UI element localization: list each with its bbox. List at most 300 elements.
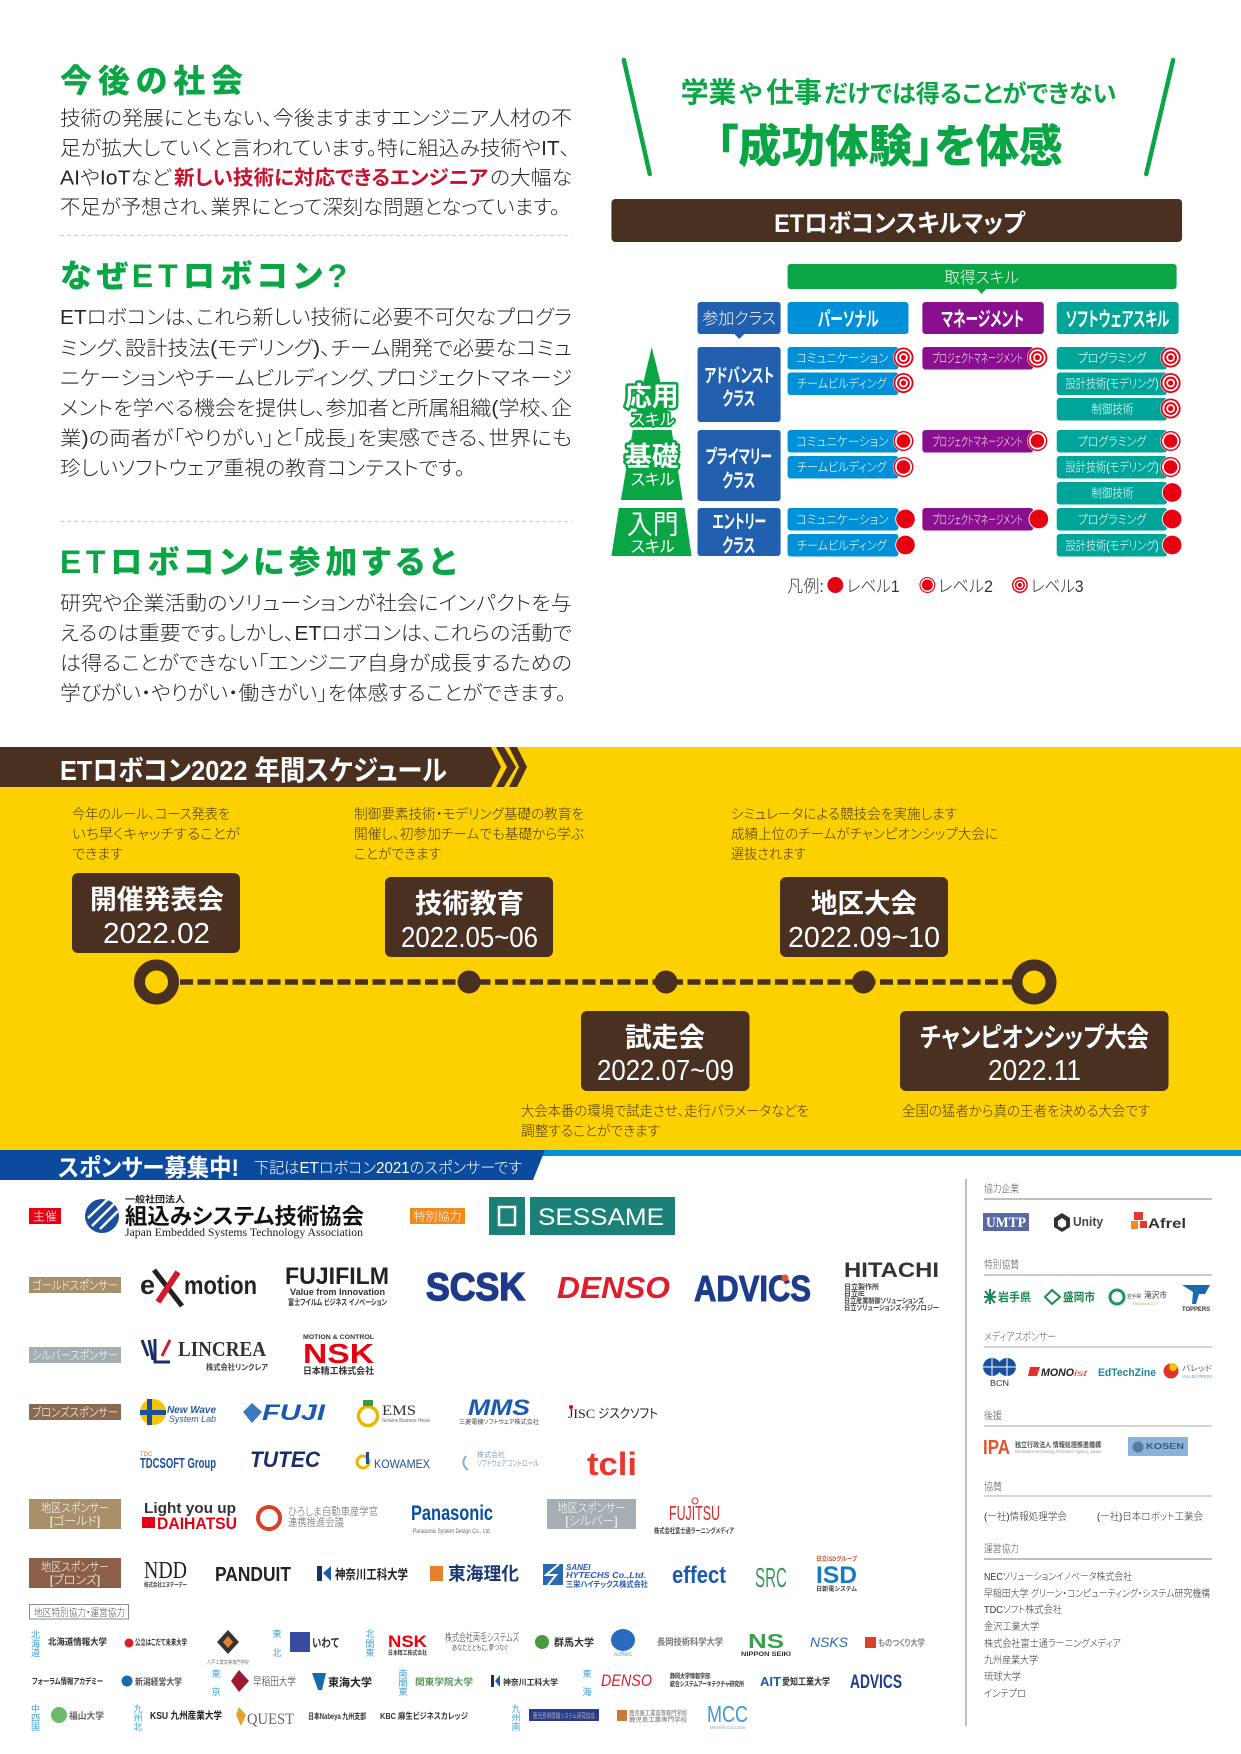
logo: Tokai University: 東海大学 (328, 1675, 372, 1689)
logo: Takizawa City: 岩手県 (1127, 1293, 1141, 1300)
logo: NSK: 日本精工株式会社 (303, 1365, 374, 1376)
logo: TOPPERS (1182, 1285, 1211, 1313)
logo: Takizawa City: 滝沢市 (1144, 1290, 1167, 1300)
logo: Nippon Seiki (741, 1631, 791, 1658)
header: software skills: ソフトウェアスキル (1066, 308, 1169, 331)
logo: JASA: 組込みシステム技術協会 (125, 1204, 364, 1229)
logo: Ryomo Systems (445, 1631, 519, 1652)
region: Hokkaido: 北 (31, 1630, 40, 1640)
logo: AIT: 愛知工業大学 (782, 1676, 830, 1688)
logo: ISD: 日新電システム (816, 1585, 857, 1593)
panel: cooperating companies (983, 1183, 1212, 1232)
tier: basic skills: 基礎 (625, 442, 679, 472)
panel: operational cooperation: インテプロ (984, 1688, 1026, 1700)
skill: advanced team building: チームビルディング (797, 376, 887, 391)
legend (787, 577, 1084, 596)
region: Hokkaido (31, 1630, 40, 1658)
logo: Nagaoka University of Technology: 長岡技術科学大学 (657, 1636, 723, 1647)
logo: Fujitsu: 株式会社富士通ラーニングメディア (654, 1526, 734, 1535)
event: technical education: 開催し、初参加チームでも基礎から学ぶ (354, 826, 584, 842)
logo: Fujitsu (654, 1498, 734, 1535)
panel: operational cooperation: NECソリューションイノベータ株式会社 (984, 1570, 1132, 1583)
skill: advanced communication: コミュニケーション (796, 351, 889, 366)
text block: why ET Robocon body: 珍しいソフトウェア重視の教育コンテストです。 (60, 457, 465, 480)
tier: applied skills: スキル (631, 412, 675, 429)
logo: Panduit: PANDUIT (215, 1564, 291, 1586)
text block: joining body: えるのは重要です。しかし、ETロボコンは、これらの活動で (60, 622, 572, 645)
logo: Afrel: Afrel (1148, 1215, 1186, 1231)
callout: success experience headline: 学業 (681, 77, 736, 108)
header: personal: パーソナル (818, 308, 879, 331)
tier: applied skills (625, 347, 679, 429)
event: championship: 2022.11 (988, 1055, 1081, 1087)
logo: Fukuyama University: 福山大学 (69, 1710, 104, 1721)
panel: media sponsors: メディアスポンサー (984, 1330, 1056, 1343)
heading: skill map bar: ETロボコンスキルマップ (774, 210, 1026, 238)
header: management: マネージメント (941, 308, 1024, 331)
text block: why ET Robocon body: ETロボコンは、これら新しい技術に必要不可欠なプログラ (60, 306, 572, 329)
logo: MONOist: MONO (1041, 1367, 1074, 1379)
logo: Waseda University (231, 1670, 296, 1692)
region: Tohoku: 東 (272, 1628, 282, 1639)
region: Tokai: 東 (582, 1668, 592, 1679)
event: championship: 全国の猛者から真の王者を決める大会です (902, 1103, 1150, 1119)
label: regional bronze: 地区スポンサー (41, 1560, 109, 1574)
region: Tokyo (211, 1668, 221, 1697)
class: primary: プライマリー (705, 446, 772, 468)
logo: Afrel (1131, 1212, 1186, 1231)
panel: sponsors heading band (0, 1150, 1241, 1182)
logo: FUJIFILM (285, 1263, 389, 1307)
heading: future society: 今後の社会 (60, 63, 243, 99)
logo: Software Control: 株式会社 (477, 1450, 505, 1459)
event: test run: 試走会 (625, 1023, 705, 1053)
logo: ADVICS: ADVICS (694, 1268, 811, 1309)
logo: New Wave System Lab: System Lab (169, 1414, 216, 1424)
tier: entry skills (611, 508, 692, 556)
skill: primary programming (1057, 430, 1181, 452)
logo: AIT: AIT (760, 1674, 781, 1689)
panel: support: 後援 (984, 1410, 1002, 1422)
event: announcement: いち早くキャッチすることが (72, 826, 240, 842)
logo: ISD: ISD (816, 1562, 857, 1589)
region: Tokai (582, 1668, 592, 1697)
panel: endorsement: 協賛 (984, 1480, 1002, 1493)
legend: レベル2 (938, 577, 993, 596)
class: advanced (698, 347, 781, 422)
skill: primary team building: チームビルディング (797, 459, 887, 475)
label: organizer: 主催 (33, 1210, 57, 1224)
logo: Ryomo Systems: あなたとともに、夢つなぐ (452, 1643, 508, 1652)
logo: Unity: Unity (1073, 1214, 1104, 1229)
heading: joining ET Robocon: ETロボコンに参加すると (60, 544, 456, 580)
logo: blue emblem (611, 1629, 635, 1658)
region: Minami-Kanto: 東 (398, 1686, 408, 1697)
panel: annual schedule (0, 747, 1241, 1150)
event: technical education: 2022.05~06 (401, 922, 538, 954)
logo: ISD: 日立ISDグループ (816, 1555, 857, 1563)
label: regional special cooperation (30, 1604, 128, 1619)
header: personal (788, 302, 908, 334)
logo: Software Control (463, 1450, 539, 1470)
panel: sponsors heading band: スポンサー募集中! (58, 1155, 239, 1182)
label: organizer (29, 1208, 61, 1224)
text block: future society body: の大幅な (490, 166, 572, 190)
text block: why ET Robocon body: ミング、設計技法(モデリング)、チーム開発で必要なコミュ (60, 337, 572, 360)
text block: future society body (60, 107, 572, 219)
logo: TUTEC: TUTEC (250, 1447, 321, 1472)
region: Kyushu-south: 九 (511, 1704, 521, 1714)
logo: Fukuyama University (51, 1707, 104, 1723)
region: Chushikoku: 四 (31, 1713, 40, 1723)
label: silver sponsors: シルバースポンサー (32, 1348, 118, 1362)
panel: cooperating companies: 協力企業 (984, 1183, 1019, 1195)
logo: Hitachi: 日立ソリューションズ・テクノロジー (844, 1303, 939, 1312)
logo: Gunma University (535, 1635, 594, 1649)
logo: BCN (983, 1358, 1016, 1388)
logo: Waseda University: 早稲田大学 (253, 1675, 296, 1688)
panel: future society (60, 63, 572, 219)
logo row: regional supporters 1 (31, 1628, 925, 1666)
logo: Kanagawa IT regional: 神奈川工科大学 (503, 1677, 558, 1687)
panel: media sponsors (983, 1330, 1212, 1388)
logo: Kanagawa Institute of Technology: 神奈川工科大学 (335, 1567, 408, 1582)
skill: entry team building (788, 534, 916, 556)
panel: operational cooperation: TDCソフト株式会社 (984, 1603, 1062, 1616)
logo: New Wave System Lab: New Wave (167, 1405, 216, 1416)
panel: operational cooperation: 早稲田大学 グリーン・コンピューティング・システム研究機構 (984, 1587, 1210, 1600)
callout: success experience headline: や (739, 81, 762, 108)
label: regional silver (547, 1499, 636, 1529)
region: Tokai: 海 (582, 1686, 592, 1697)
class: entry: クラス (722, 535, 755, 557)
event: regional contest: 2022.09~10 (788, 922, 940, 954)
logo: Hiroshima automotive council: ひろしま自動車産学官 (288, 1505, 378, 1518)
skill: entry modeling (1057, 534, 1182, 556)
logo: NSK (303, 1334, 374, 1376)
event: technical education: 制御要素技術・モデリング基礎の教育を (354, 806, 584, 822)
tier: basic skills: スキル (631, 472, 675, 489)
region: Kyushu-south (511, 1704, 521, 1732)
logo: FUJIFILM: Value from Innovation (290, 1287, 385, 1297)
tier: entry skills: スキル (631, 539, 675, 556)
label: gold sponsors: ゴールドスポンサー (32, 1278, 118, 1292)
logo: KOWAMEX (357, 1452, 430, 1471)
logo: IPA: 独立行政法人 情報処理推進機構 (1015, 1440, 1101, 1449)
region: Kita-Kanto: 関 (365, 1639, 375, 1649)
panel: operational cooperation: 九州産業大学 (984, 1654, 1038, 1666)
panel: why ET Robocon (60, 258, 572, 480)
logo: Ryomo Systems: 株式会社両毛システムズ (445, 1631, 519, 1644)
label: bronze sponsors: ブロンズスポンサー (32, 1404, 118, 1420)
logo: MONOist (1028, 1367, 1088, 1379)
skill: advanced programming: プログラミング (1078, 351, 1147, 366)
logo: KOSEN (1128, 1437, 1188, 1456)
region: Tohoku: 北 (272, 1648, 282, 1658)
logo: Daihatsu: Light you up (144, 1500, 236, 1517)
skill: primary project management (922, 430, 1048, 452)
text block: why ET Robocon body: メントを学べる機会を提供し、参加者と所属組織(学校、企 (60, 397, 572, 420)
skill: primary team building (788, 456, 914, 478)
region: Chushikoku: 中 (31, 1703, 40, 1714)
logo: JISC: ジスクソフト (598, 1406, 658, 1421)
callout: success experience headline: だけでは得ることができない (824, 80, 1116, 108)
logo: MCC: MCC (707, 1701, 748, 1727)
region: Minami-Kanto (398, 1668, 408, 1697)
logo: Hitachi: 日立IE (844, 1289, 865, 1298)
logo: LINCREA: LINCREA (178, 1337, 267, 1361)
skill: entry project management (922, 508, 1049, 530)
skill: entry programming (1057, 508, 1182, 530)
skill: entry team building: チームビルディング (797, 538, 887, 553)
region: Minami-Kanto: 関 (398, 1678, 408, 1688)
logo: effect: effect (672, 1562, 726, 1589)
logo: NSK regional (388, 1632, 428, 1657)
callout: success experience headline: 「成功体験」を体感 (716, 121, 1063, 172)
logo: Sanei Hytechs: SANEI (566, 1563, 591, 1572)
logo: NSK regional: 日本精工株式会社 (388, 1649, 427, 1657)
event: regional contest: 選抜されます (731, 846, 806, 862)
logo: FUJI: FUJI (262, 1400, 326, 1425)
logo: Shizuoka University program (670, 1671, 744, 1688)
legend: レベル3 (1031, 577, 1084, 596)
logo: Hitachi: HITACHI (844, 1259, 939, 1282)
logo: Valeo Press: VALLED PRESS (1182, 1374, 1212, 1379)
class: primary (698, 430, 781, 501)
logo: TOPPERS: TOPPERS (1182, 1306, 1211, 1313)
text block: why ET Robocon body (60, 306, 572, 480)
label: special cooperation: 特別協力 (413, 1210, 462, 1224)
logo: Panasonic: Panasonic (411, 1502, 493, 1525)
logo: tcli: tcli (587, 1446, 637, 1482)
text block: future society body: 技術の発展にともない、今後ますますエンジニア人材の不 (60, 107, 572, 130)
heading: acquired skills (788, 264, 1177, 294)
logo: TDC SOFT: TDCSOFT Group (140, 1455, 216, 1472)
skill: advanced control: 制御技術 (1092, 402, 1133, 417)
logo: EMS: EMS (382, 1403, 416, 1419)
logo: IPA (983, 1437, 1101, 1459)
logo: eXmotion (140, 1270, 257, 1306)
logo: eXmotion: motion (184, 1270, 257, 1300)
event: regional contest: シミュレータによる競技会を実施します (731, 806, 957, 822)
header: class column (698, 302, 781, 339)
skill: advanced modeling (1057, 372, 1181, 395)
logo: DENSO: DENSO (557, 1270, 670, 1305)
heading: acquired skills: 取得スキル (944, 269, 1019, 287)
event: regional contest: 成績上位のチームがチャンピオンシップ大会に (731, 826, 998, 842)
logo: Niigata University of Management (122, 1676, 182, 1687)
panel: joining ET Robocon (60, 544, 572, 705)
logo: MMS (459, 1395, 539, 1426)
logo: Panasonic: Panasonic System Design Co., Ltd. (413, 1529, 491, 1535)
region: Chushikoku: 国 (31, 1722, 40, 1732)
panel: operational cooperation: 琉球大学 (984, 1671, 1021, 1683)
logo: Software Control: ソフトウェアコントロール (477, 1459, 539, 1468)
logo: EMS: Genuine Business House (382, 1418, 430, 1424)
logo: EMS (358, 1400, 430, 1426)
class: advanced: アドバンスト (704, 365, 774, 387)
panel: endorsement: (一社)日本ロボット工業会 (1097, 1510, 1203, 1523)
event: test run (521, 1011, 809, 1139)
logo: JASA: Japan Embedded Systems Technology Association (125, 1225, 363, 1239)
logo: navy banner: 鹿児島県情報システム研究協会 (533, 1711, 595, 1720)
heading: skill map bar (611, 199, 1182, 242)
logo: Morioka City: 盛岡市 (1063, 1290, 1095, 1304)
text block: future society body: 新しい技術に対応できるエンジニア (174, 166, 489, 190)
logo: MMS: 三菱電機ソフトウェア株式会社 (459, 1418, 539, 1426)
logo: Fujitsu: FUJITSU (669, 1503, 720, 1525)
panel: sponsors heading band: 下記はETロボコン2021のスポンサーです (254, 1159, 522, 1177)
logo: IPA: IPA (983, 1437, 1010, 1459)
event: technical education: 技術教育 (415, 889, 524, 919)
logo: Takizawa City: TAKIZAWA CITY (1132, 1302, 1160, 1306)
logo: Takizawa City (1110, 1290, 1167, 1306)
logo: Kanto Gakuin University: 関東学院大学 (415, 1676, 473, 1687)
logo row: regional supporters 2 (32, 1668, 902, 1697)
panel: special sponsorship (984, 1258, 1212, 1313)
logo: SCSK: SCSK (426, 1266, 525, 1309)
logo: Morioka City (1045, 1290, 1095, 1304)
class: entry (698, 508, 781, 557)
event: championship (900, 1011, 1168, 1119)
region: Kita-Kanto: 東 (365, 1647, 375, 1658)
skill: entry modeling: 設計技術(モデリング) (1066, 538, 1159, 553)
pyramid: skill levels (611, 347, 692, 556)
logo: Nippon Seiki: NS (748, 1631, 784, 1653)
logo: FUJI (243, 1400, 326, 1425)
text block: future society body: 足が拡大していくと言われています。特に組込み技術やIT、 (60, 137, 570, 160)
label: regional silver: 地区スポンサー (558, 1501, 626, 1515)
logo: NSK regional: NSK (388, 1632, 428, 1651)
logo: NDD: NDD (144, 1558, 187, 1584)
logo: MONOist: ist (1074, 1369, 1088, 1378)
skill: entry project management: プロジェクトマネージメント (932, 513, 1023, 527)
logo: SESSAME (489, 1197, 675, 1235)
logo: Iwate: いわて (312, 1636, 339, 1650)
skill: primary project management: プロジェクトマネージメント (932, 435, 1023, 449)
logo: Kanagawa IT regional (491, 1675, 558, 1687)
logo: MCC: MINAMI COLLEGE (710, 1725, 746, 1730)
event: announcement (72, 806, 240, 953)
logo: NSK: MOTION & CONTROL (303, 1334, 374, 1341)
logo: Daihatsu (142, 1500, 237, 1533)
logo: FUJIFILM: 富士フイルム ビジネス イノベーション (288, 1297, 387, 1307)
logo: Forum Information Academy: フォーラム情報アカデミー (32, 1676, 103, 1686)
logo: LINCREA: 株式会社リンクレア (206, 1362, 268, 1372)
logo: navy banner (529, 1709, 599, 1721)
heading: annual schedule: ETロボコン2022 年間スケジュール (60, 755, 447, 786)
logo: technical college: 鹿児島工業高等専門学校 (629, 1708, 687, 1717)
region: Kyushu-north: 北 (133, 1722, 143, 1732)
event: announcement: 2022.02 (103, 918, 210, 950)
event: announcement: 開催発表会 (90, 885, 224, 915)
skill: primary communication: コミュニケーション (796, 435, 889, 449)
logo: Daihatsu: DAIHATSU (157, 1514, 237, 1533)
logo: Shizuoka University program: 統合システムアーキテクチャ研究所 (670, 1679, 744, 1688)
logo: Nippon Seiki: NIPPON SEIKI (741, 1652, 791, 1658)
tier: entry skills: 入門 (627, 510, 679, 540)
skill: primary control: 制御技術 (1092, 486, 1133, 501)
skill: advanced modeling: 設計技術(モデリング) (1066, 376, 1159, 391)
panel: operational cooperation: 金沢工業大学 (984, 1621, 1039, 1633)
event: regional contest: 地区大会 (811, 889, 917, 919)
logo: Hitachi (844, 1259, 939, 1312)
logo: KSU: KSU 九州産業大学 (150, 1709, 222, 1722)
region: Kyushu-south: 州 (511, 1713, 521, 1723)
logo: KBC: KBC 麻生ビジネスカレッジ (380, 1711, 469, 1721)
callout: success experience headline: 仕事 (766, 77, 822, 108)
timeline (140, 965, 1051, 999)
class: advanced: クラス (722, 388, 755, 410)
legend: レベル1 (847, 577, 899, 596)
logo: ISD (816, 1555, 857, 1593)
logo: LINCREA (142, 1337, 268, 1372)
skill: advanced team building (788, 372, 914, 395)
logo: Gunma University: 群馬大学 (554, 1636, 594, 1649)
logo: Quest (236, 1707, 294, 1728)
skill: primary control (1057, 482, 1182, 504)
logo: diamond emblem: 八戸工業高等専門学校 (207, 1659, 249, 1666)
skill: primary modeling (1057, 456, 1181, 478)
label: regional gold: 地区スポンサー (41, 1501, 109, 1515)
logo: NDD: 株式会社エヌデーデー (144, 1581, 187, 1589)
heading: why ET Robocon: なぜETロボコン? (60, 258, 347, 294)
logo: Valeo Press: バレッド (1182, 1364, 1212, 1373)
label: regional bronze (29, 1558, 121, 1588)
event: technical education: ことができます (354, 846, 441, 862)
logo: blue emblem: softec (614, 1652, 632, 1658)
logo: Tokai Rika: 東海理化 (448, 1564, 519, 1584)
skill: advanced control (1057, 398, 1181, 420)
region: Hokkaido: 海 (31, 1638, 40, 1649)
logo: Tokai University (312, 1673, 372, 1690)
logo: JISC (568, 1405, 658, 1421)
text block: future society body: 不足が予想され、業界にとって深刻な問題となっています。 (60, 196, 560, 219)
skill: entry communication: コミュニケーション (796, 513, 889, 527)
panel: endorsement: (一社)情報処理学会 (984, 1510, 1067, 1523)
callout: success experience headline (624, 60, 1173, 174)
region: Tokyo: 京 (211, 1687, 221, 1697)
legend: 凡例: (787, 577, 824, 596)
skill: advanced communication (788, 347, 914, 370)
logo: DENSO regional: DENSO (601, 1671, 652, 1690)
logo: BCN: BCN (990, 1379, 1009, 1388)
panel: operational cooperation: 運営協力 (984, 1542, 1019, 1555)
text block: joining body: は得ることができない「エンジニア自身が成長するための (60, 652, 572, 675)
logo: NSK: NSK (303, 1338, 374, 1369)
logo: Future University Hakodate (124, 1637, 187, 1648)
skill: primary programming: プログラミング (1078, 435, 1147, 449)
logo: TDC SOFT (140, 1452, 216, 1472)
event: announcement: できます (72, 846, 123, 862)
label: regional gold (29, 1499, 121, 1529)
skill: entry programming: プログラミング (1078, 513, 1147, 527)
logo: MMS: MMS (468, 1395, 530, 1420)
logo: Iwate Prefecture: 岩手県 (998, 1290, 1031, 1304)
panel: operational cooperation (984, 1542, 1212, 1700)
logo: JASA: 一般社団法人 (125, 1194, 185, 1204)
skill: primary modeling: 設計技術(モデリング) (1066, 459, 1159, 475)
logo: diamond emblem (207, 1630, 249, 1666)
region: Kyushu-south: 南 (511, 1721, 521, 1732)
logo: Future University Hakodate: 公立はこだて未来大学 (135, 1637, 187, 1647)
logo: EdTechZine: EdTechZine (1098, 1367, 1156, 1379)
region: Kyushu-north (133, 1704, 143, 1732)
logo: Hokkaido Information University: 北海道情報大学 (48, 1636, 107, 1647)
logo: IPA: Information-technology Promotion Agency, Japan (1015, 1449, 1101, 1454)
class: entry: エントリー (712, 512, 766, 533)
logo: Sanei Hytechs: 三栄ハイテックス株式会社 (566, 1579, 648, 1589)
